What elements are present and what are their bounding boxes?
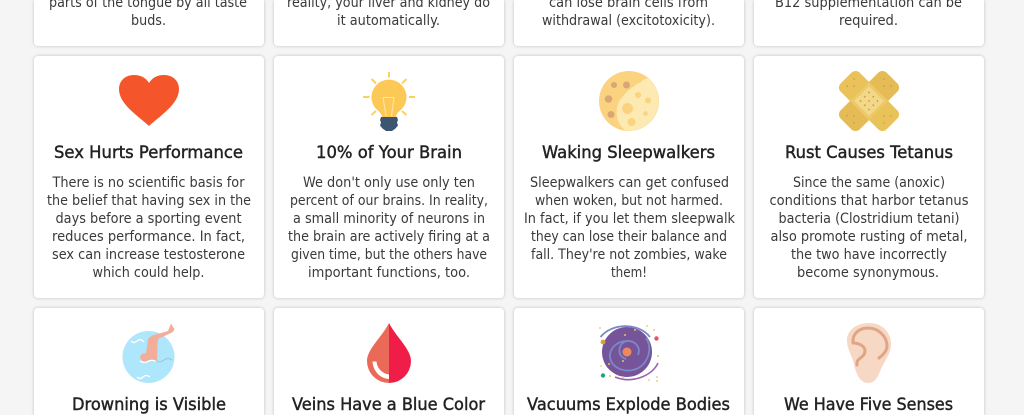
body text: Since the same (anoxic) bbox=[793, 175, 945, 191]
body text: buds. bbox=[131, 13, 166, 29]
heading: Waking Sleepwalkers bbox=[542, 143, 715, 163]
body text: the brain are actively firing at a bbox=[288, 229, 490, 245]
icon: drowning swimmer bbox=[122, 324, 174, 383]
body text bbox=[288, 175, 490, 281]
panel: we have five senses bbox=[754, 308, 984, 415]
panel: vacuums explode bodies bbox=[514, 308, 744, 415]
panel: sex hurts performance bbox=[34, 56, 264, 298]
body text bbox=[770, 175, 968, 281]
body text: when woken, but not harmed. bbox=[535, 193, 723, 209]
panel: waking sleepwalkers bbox=[514, 56, 744, 298]
body text bbox=[524, 175, 736, 281]
body text bbox=[287, 0, 490, 29]
heading: Vacuums Explode Bodies bbox=[527, 395, 730, 415]
body text: required. bbox=[839, 13, 898, 29]
icon: galaxy bbox=[599, 325, 659, 382]
panel: drowning is visible bbox=[34, 308, 264, 415]
panel: B12 card (cut off) bbox=[754, 0, 984, 46]
heading: Drowning is Visible bbox=[72, 395, 226, 415]
body text: they can lose their balance and bbox=[531, 229, 727, 245]
body text: which could help. bbox=[92, 265, 204, 281]
icon: ear bbox=[847, 323, 891, 383]
body text: In fact, if you let them sleepwalk bbox=[524, 211, 736, 227]
heading: Veins Have a Blue Color bbox=[292, 395, 485, 415]
body text: withdrawal (excitotoxicity). bbox=[542, 13, 715, 29]
body text bbox=[47, 175, 251, 281]
body text: There is no scientific basis for bbox=[52, 175, 245, 191]
body text: also promote rusting of metal, bbox=[770, 229, 968, 245]
body text: bacteria (Clostridium tetani) bbox=[778, 211, 960, 227]
body text bbox=[49, 0, 247, 29]
icon: light bulb bbox=[363, 72, 415, 131]
body text: days before a sporting event bbox=[56, 211, 242, 227]
panel: veins have a blue color bbox=[274, 308, 504, 415]
heading: We Have Five Senses bbox=[784, 395, 953, 415]
body text: percent of our brains. In reality, bbox=[290, 193, 488, 209]
body text: reduces performance. In fact, bbox=[52, 229, 245, 245]
heading: Sex Hurts Performance bbox=[54, 143, 243, 163]
body text: important functions, too. bbox=[308, 265, 470, 281]
body text bbox=[775, 0, 962, 29]
panel: detox card (cut off) bbox=[274, 0, 504, 46]
body text bbox=[542, 0, 715, 29]
body text: the belief that having sex in the bbox=[47, 193, 251, 209]
heading: Rust Causes Tetanus bbox=[785, 143, 953, 163]
panel: alcohol card (cut off) bbox=[514, 0, 744, 46]
body text: them! bbox=[611, 265, 647, 281]
body text: given time, but the others have bbox=[291, 247, 487, 263]
body text: conditions that harbor tetanus bbox=[770, 193, 968, 209]
icon: heart bbox=[119, 75, 179, 126]
icon: bandage bbox=[823, 55, 915, 147]
body text: sex can increase testosterone bbox=[52, 247, 245, 263]
panel: rust causes tetanus bbox=[754, 55, 984, 298]
body text: fall. They're not zombies, wake bbox=[531, 247, 727, 263]
body text: Sleepwalkers can get confused bbox=[530, 175, 729, 191]
body text: become synonymous. bbox=[797, 265, 939, 281]
icon: blood drop bbox=[367, 323, 411, 383]
heading: 10% of Your Brain bbox=[316, 143, 462, 163]
panel: 10% of your brain bbox=[274, 56, 504, 298]
panel: taste buds card (cut off) bbox=[34, 0, 264, 46]
body text: We don't only use only ten bbox=[303, 175, 475, 191]
body text: it automatically. bbox=[337, 13, 440, 29]
body text: the two have incorrectly bbox=[791, 247, 947, 263]
icon: moon bbox=[599, 71, 659, 131]
body text: a small minority of neurons in bbox=[293, 211, 485, 227]
